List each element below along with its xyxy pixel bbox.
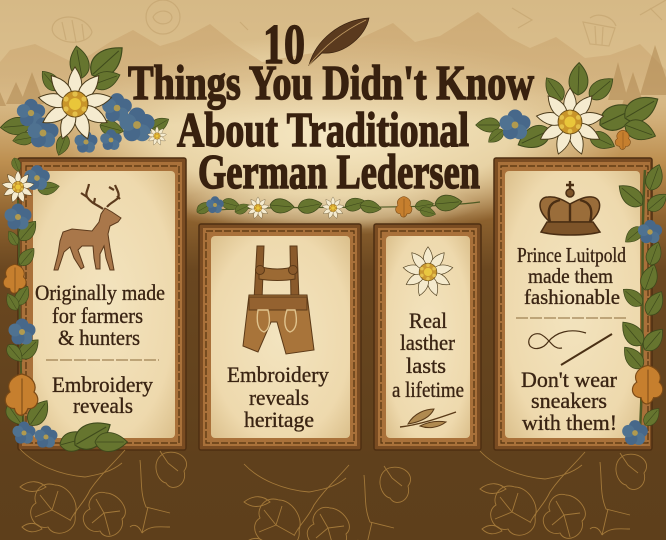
text: embroidery reveals bbox=[52, 372, 153, 418]
text: prince luitpold made them fashionable: fashionable bbox=[524, 285, 620, 309]
text: embroidery reveals heritage: Embroidery bbox=[227, 362, 329, 387]
icon: feather bbox=[309, 18, 369, 65]
floral vine: right bbox=[614, 162, 666, 445]
text: prince luitpold made them fashionable: made them bbox=[528, 264, 613, 288]
text: embroidery reveals: reveals bbox=[73, 393, 133, 418]
text: don't wear sneakers with them bbox=[521, 367, 618, 435]
floral cluster: top left bbox=[0, 39, 172, 157]
text: embroidery reveals heritage bbox=[227, 362, 329, 432]
panel: real leather bbox=[374, 224, 481, 450]
icon: leaf sprig bbox=[400, 409, 456, 428]
icon: needle and thread bbox=[529, 331, 612, 365]
text: originally made for farmers and hunters: & hunters bbox=[58, 325, 140, 350]
text: embroidery reveals heritage: heritage bbox=[244, 407, 314, 432]
panel: farmers and hunters bbox=[18, 158, 186, 450]
floral garland under title bbox=[194, 194, 480, 219]
text: real leather lasts a lifetime: a lifetime bbox=[392, 377, 464, 402]
text: don't wear sneakers with them: Don't wear bbox=[521, 367, 618, 392]
text: prince luitpold made them fashionable bbox=[517, 243, 626, 309]
icon: crown bbox=[540, 181, 600, 235]
text: originally made for farmers and hunters: Originally made bbox=[35, 280, 165, 305]
floral line art: bottom bbox=[20, 449, 647, 540]
title number 10: 10 bbox=[263, 14, 305, 76]
floral vine: left bbox=[1, 157, 127, 455]
text: don't wear sneakers with them: sneakers bbox=[531, 388, 607, 413]
text: don't wear sneakers with them: with them! bbox=[522, 410, 617, 435]
text: originally made for farmers and hunters: for farmers bbox=[52, 303, 143, 328]
text: real leather lasts a lifetime: lasther bbox=[400, 330, 456, 355]
panel: prince luitpold bbox=[494, 158, 652, 450]
icon: stag bbox=[54, 184, 121, 270]
title line 1: Things You Didn't Know bbox=[128, 55, 534, 110]
icon: lederhosen bbox=[243, 246, 314, 354]
trees bbox=[0, 45, 666, 106]
title line 3: German Ledersen bbox=[198, 144, 480, 199]
faint stamp motifs bbox=[52, 0, 666, 46]
title bbox=[128, 14, 534, 199]
text: embroidery reveals heritage: reveals bbox=[249, 385, 309, 410]
floral cluster: top right bbox=[476, 62, 663, 156]
panel: lederhosen bbox=[199, 224, 361, 450]
text: real leather lasts a lifetime bbox=[392, 308, 464, 402]
text: real leather lasts a lifetime: lasts bbox=[406, 353, 446, 378]
mountains bbox=[0, 12, 666, 125]
text: real leather lasts a lifetime: Real bbox=[409, 308, 447, 333]
title line 2: About Traditional bbox=[177, 102, 469, 157]
icon: edelweiss outline bbox=[402, 247, 454, 297]
text: embroidery reveals: Embroidery bbox=[52, 372, 153, 397]
text: originally made for farmers and hunters bbox=[35, 280, 165, 350]
text: prince luitpold made them fashionable: Prince Luitpold bbox=[517, 243, 626, 267]
